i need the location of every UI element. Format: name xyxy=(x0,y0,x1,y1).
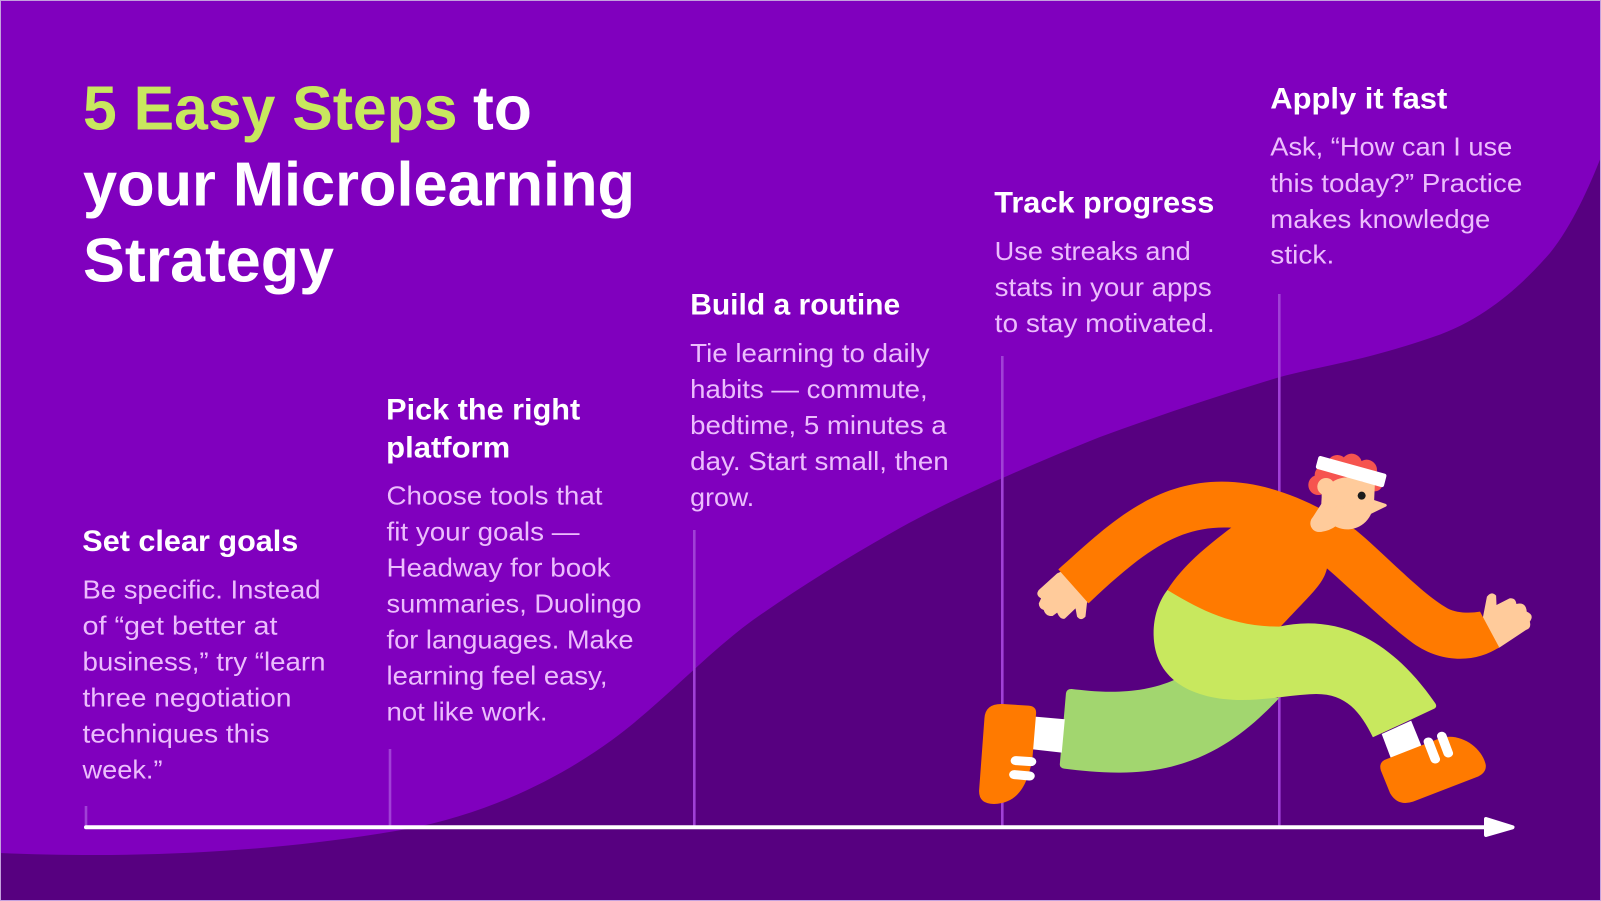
body: step 4 xyxy=(995,236,1215,338)
sweater and arms xyxy=(1058,482,1499,659)
body: step 3: habits — commute, xyxy=(690,374,928,404)
heading: pick the right platform: Pick the right xyxy=(386,393,580,426)
panel: step 2 pick the right platform xyxy=(386,393,642,727)
title: your Microlearning xyxy=(83,150,635,220)
body: step 3: grow. xyxy=(690,482,754,512)
panel: step 1 set clear goals xyxy=(81,525,325,784)
back leg xyxy=(1060,679,1279,773)
heading: pick the right platform xyxy=(386,393,580,464)
body: step 4: to stay motivated. xyxy=(995,308,1215,338)
body: step 2: not like work. xyxy=(386,697,548,727)
title: Strategy xyxy=(83,226,335,296)
panel: step 5 apply it fast xyxy=(1270,82,1522,270)
body: step 5: this today?” Practice xyxy=(1270,168,1522,198)
title: to xyxy=(473,74,532,144)
body: step 2 xyxy=(386,481,642,727)
body: step 2: fit your goals — xyxy=(386,517,580,547)
title xyxy=(83,74,635,296)
body: step 2: for languages. Make xyxy=(386,625,634,655)
headband xyxy=(1316,456,1386,487)
body: step 1 xyxy=(81,574,325,784)
front hand xyxy=(1474,593,1532,652)
body: step 3: bedtime, 5 minutes a xyxy=(690,410,947,440)
body: step 5: Ask, “How can I use xyxy=(1270,132,1512,162)
body: step 5: makes knowledge xyxy=(1270,204,1490,234)
front sock xyxy=(1382,721,1421,758)
body: step 5: stick. xyxy=(1270,240,1334,270)
body: step 1: techniques this xyxy=(82,718,270,748)
body: step 3: Tie learning to daily xyxy=(690,338,930,368)
back shoe xyxy=(979,704,1036,804)
body: step 1: business,” try “learn xyxy=(82,646,326,676)
body: step 1: week.” xyxy=(81,754,162,784)
heading: set clear goals: Set clear goals xyxy=(82,525,298,558)
heading: apply it fast: Apply it fast xyxy=(1270,82,1447,115)
title: 5 Easy Steps xyxy=(83,74,458,144)
body: step 3: day. Start small, then xyxy=(690,446,949,476)
back sock xyxy=(1032,717,1065,753)
body: step 4: Use streaks and xyxy=(995,236,1191,266)
head xyxy=(1308,454,1387,532)
step marker lines xyxy=(86,294,1279,826)
illustration: running person xyxy=(979,454,1532,804)
panel: step 3 build a routine xyxy=(690,289,949,512)
face and neck xyxy=(1310,477,1387,532)
eye xyxy=(1358,492,1366,500)
body: step 2: learning feel easy, xyxy=(386,661,608,691)
hair xyxy=(1308,454,1382,495)
body: step 1: of “get better at xyxy=(82,610,278,640)
body: step 5 xyxy=(1270,132,1522,270)
body: step 3 xyxy=(690,338,949,512)
body: step 1: Be specific. Instead xyxy=(82,574,320,604)
person body xyxy=(979,482,1532,804)
body: step 2: Choose tools that xyxy=(386,481,603,511)
body: step 2: Headway for book xyxy=(386,553,612,583)
body: step 2: summaries, Duolingo xyxy=(386,589,642,619)
back hand xyxy=(1037,570,1095,619)
body: step 4: stats in your apps xyxy=(995,272,1212,302)
heading: build a routine: Build a routine xyxy=(690,289,900,322)
heading: pick the right platform: platform xyxy=(386,431,510,464)
front leg and hips xyxy=(1154,590,1436,737)
body: step 1: three negotiation xyxy=(82,682,292,712)
timeline arrow xyxy=(86,819,1512,835)
front shoe xyxy=(1380,736,1486,803)
panel: step 4 track progress xyxy=(994,186,1215,338)
heading: track progress: Track progress xyxy=(994,186,1214,219)
